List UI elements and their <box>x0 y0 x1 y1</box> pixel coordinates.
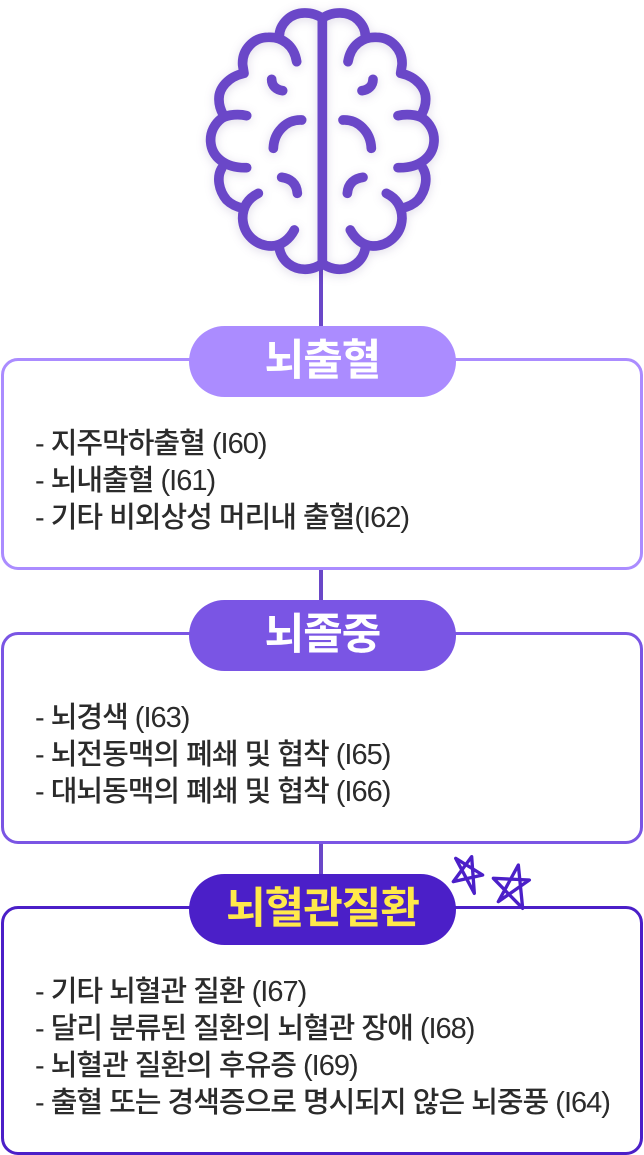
icon: brain <box>202 7 442 280</box>
heading: 뇌혈관질환 <box>189 874 456 945</box>
heading: 뇌출혈: 뇌출혈 <box>265 337 380 385</box>
connector line: second to third panel <box>319 842 323 878</box>
text block: 뇌출혈 list <box>35 428 409 534</box>
text block: 뇌혈관질환 list <box>35 976 610 1119</box>
connector line: brain to first panel <box>319 265 323 330</box>
text block: 뇌졸중 list: - 뇌경색 (I63) <box>35 702 189 734</box>
heading: 뇌졸중 <box>189 600 456 671</box>
text block: 뇌출혈 list: - 뇌내출혈 (I61) <box>35 465 215 497</box>
text block: 뇌졸중 list <box>35 702 390 808</box>
panel: 뇌졸중 <box>1 632 643 844</box>
text block: 뇌졸중 list: - 대뇌동맥의 폐쇄 및 협착 (I66) <box>35 776 390 808</box>
heading: 뇌출혈 <box>189 326 456 397</box>
text block: 뇌혈관질환 list: - 달리 분류된 질환의 뇌혈관 장애 (I68) <box>35 1013 474 1045</box>
panel: 뇌혈관질환 <box>1 906 643 1155</box>
text block: 뇌출혈 list: - 지주막하출혈 (I60) <box>35 428 266 460</box>
text block: 뇌출혈 list: - 기타 비외상성 머리내 출혈(I62) <box>35 502 409 534</box>
heading: 뇌혈관질환: 뇌혈관질환 <box>226 885 419 933</box>
text block: 뇌혈관질환 list: - 출혈 또는 경색증으로 명시되지 않은 뇌중풍 (I64) <box>35 1087 610 1119</box>
heading: 뇌졸중: 뇌졸중 <box>265 611 380 659</box>
panel: 뇌출혈 <box>1 358 643 570</box>
text block: 뇌혈관질환 list: - 기타 뇌혈관 질환 (I67) <box>35 976 306 1008</box>
text block: 뇌혈관질환 list: - 뇌혈관 질환의 후유증 (I69) <box>35 1050 358 1082</box>
connector line: first to second panel <box>319 568 323 604</box>
text block: 뇌졸중 list: - 뇌전동맥의 폐쇄 및 협착 (I65) <box>35 739 390 771</box>
